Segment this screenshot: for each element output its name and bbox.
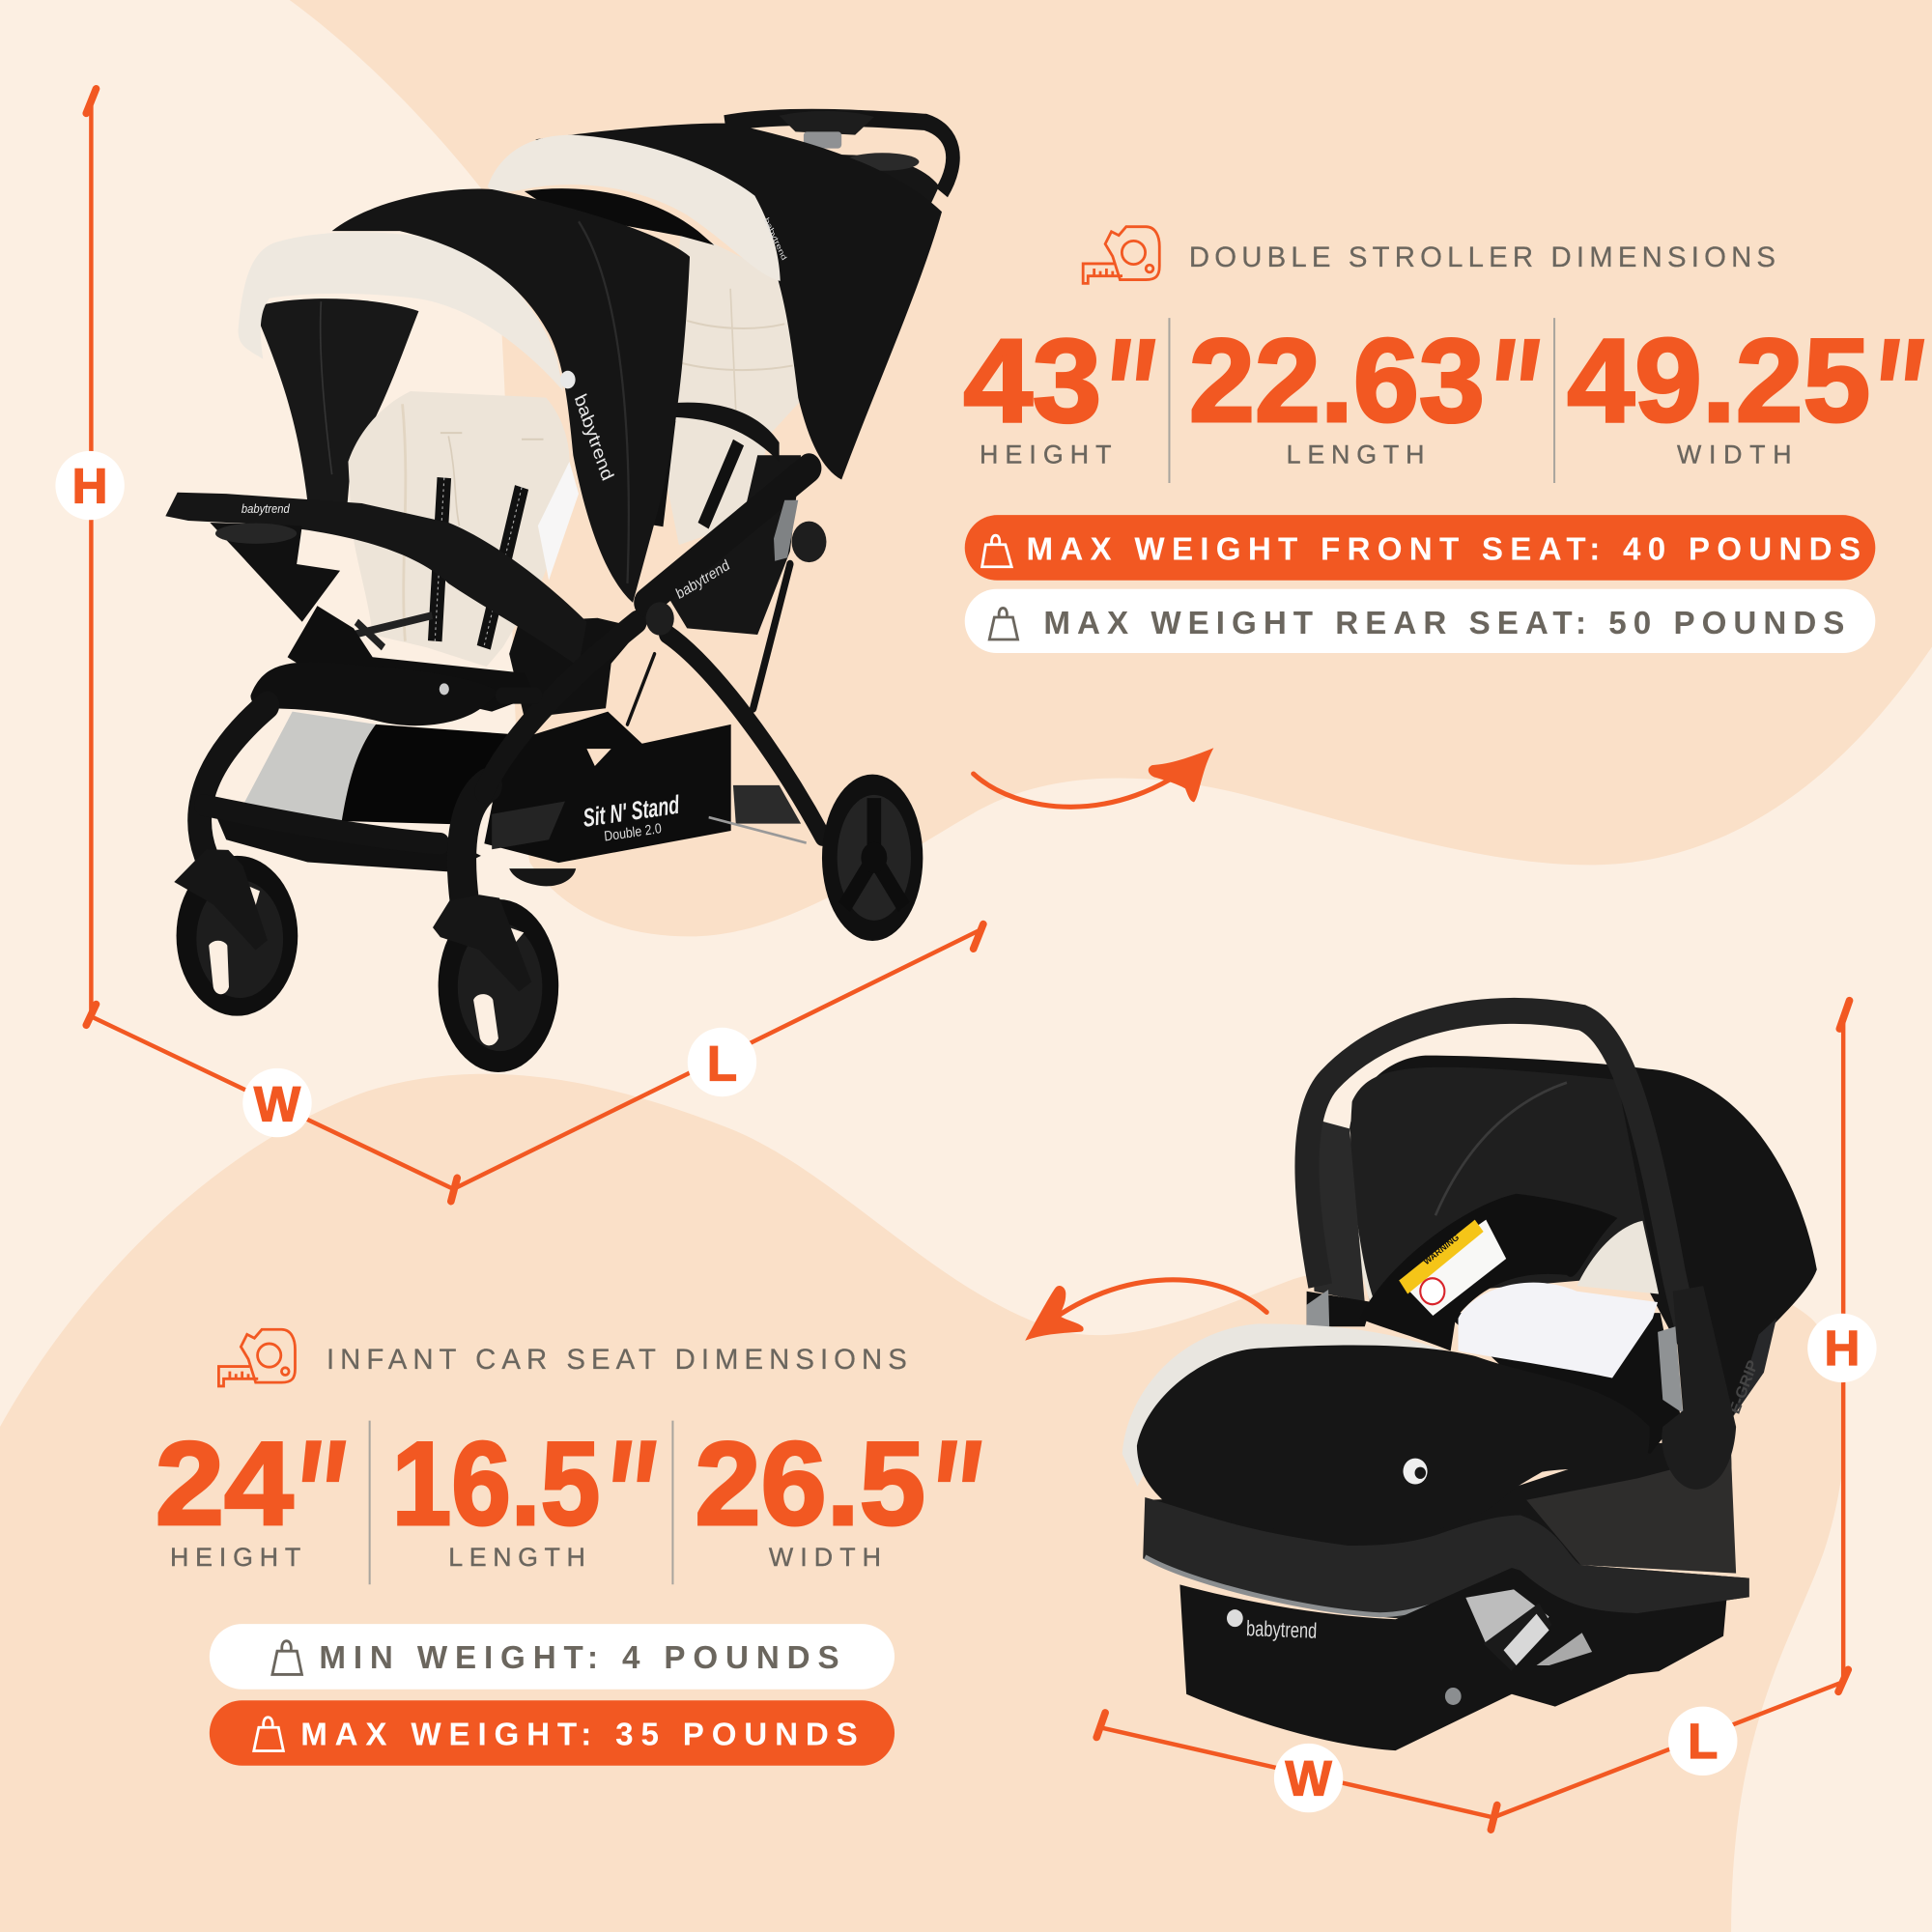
dimension marker W: W [254, 1077, 301, 1132]
dimension: length: 16.5 [392, 1417, 600, 1549]
carry handle [1307, 1010, 1716, 1443]
belt and buckle [1465, 1589, 1592, 1671]
pill: min weight [210, 1624, 895, 1690]
dimension: width: WIDTH [1677, 440, 1792, 469]
warning label [1399, 1220, 1506, 1316]
frame hubs and logo [646, 500, 826, 636]
rear under-seat shadow [660, 455, 801, 635]
frame hubs and logo: babytrend [674, 557, 732, 603]
dimension marker L [688, 1028, 756, 1096]
background blob: bottom left [0, 1074, 1845, 1932]
dimension: width: " [925, 1406, 982, 1591]
head support [1360, 1194, 1617, 1350]
dimension marker H: H [72, 458, 108, 513]
pill: max weight front seat: MAX WEIGHT FRONT SEAT: 40 POUNDS [1026, 532, 1861, 568]
front canopy inner [253, 298, 418, 529]
rear canopy [488, 124, 942, 480]
cream canopy side [1577, 1221, 1659, 1294]
heading: DOUBLE STROLLER DIMENSIONS [1189, 242, 1776, 273]
dimension: length [392, 1406, 657, 1591]
dimension: height: 24 [156, 1417, 294, 1549]
storage basket [484, 712, 731, 863]
dimension: length: LENGTH [448, 1543, 585, 1572]
dimension marker H: H [1824, 1321, 1860, 1376]
infant car seat illustration [1122, 1010, 1817, 1750]
icon: tape measure [218, 1329, 295, 1386]
dark body behind front seat [509, 618, 641, 718]
dimension marker W [242, 1068, 312, 1137]
rear footboard [709, 785, 807, 843]
dimension: height: HEIGHT [980, 440, 1112, 469]
front mesh basket panel [243, 712, 509, 824]
dimension: width: WIDTH [769, 1543, 881, 1572]
background blob: top right [290, 0, 1932, 936]
base body: babytrend [1246, 1615, 1318, 1643]
pill: min weight: MIN WEIGHT: 4 POUNDS [319, 1640, 839, 1676]
storage basket: Sit N' Stand [582, 790, 681, 833]
warning label: WARNING [1422, 1232, 1461, 1266]
rear seat pad [657, 228, 804, 545]
canopy [1347, 1056, 1817, 1416]
front tray and handlebar: babytrend [242, 501, 291, 516]
infant car seat specs [156, 1329, 982, 1766]
double stroller specs [963, 227, 1925, 653]
dimension marker H [1807, 1314, 1877, 1382]
front harness straps [354, 478, 522, 647]
front right wheel [433, 895, 558, 1072]
front left wheel [174, 849, 298, 1016]
storage basket: Double 2.0 [604, 820, 662, 844]
infant car seat dimension lines [1096, 1001, 1877, 1830]
front canopy: babytrend [570, 391, 617, 484]
dimension: width: 49.25 [1567, 314, 1870, 446]
dimension marker L: L [707, 1037, 737, 1092]
blanket [1122, 1323, 1650, 1541]
dimension: height: " [290, 1406, 347, 1591]
front footrest [250, 662, 500, 725]
dimension: length [1189, 303, 1541, 489]
dimension: width [695, 1406, 982, 1591]
dimension: height [963, 303, 1156, 489]
curved arrow toward stroller specs [974, 748, 1213, 807]
rear body [1526, 1454, 1736, 1574]
dimension marker L: L [1688, 1714, 1718, 1769]
base body [1179, 1568, 1727, 1750]
handle pivot arm [1658, 1286, 1736, 1490]
dark backing behind seat [1148, 1443, 1734, 1565]
curved arrow toward car seat specs [1025, 1280, 1266, 1341]
stroller frame [200, 469, 823, 904]
double stroller dimension lines [55, 89, 983, 1202]
front seat pad [348, 391, 579, 667]
side panel [1309, 1118, 1365, 1302]
pill: max weight rear seat: MAX WEIGHT REAR SEAT: 50 POUNDS [1043, 606, 1844, 641]
pill: max weight front seat [965, 515, 1875, 581]
canopy: E-GRIP [1726, 1357, 1762, 1416]
rear seat bar and straps [657, 403, 780, 526]
left latch [1307, 1290, 1373, 1326]
rear wheel [822, 775, 923, 941]
heading: INFANT CAR SEAT DIMENSIONS [327, 1344, 907, 1376]
under-frame body [215, 814, 576, 886]
tray arm overlay [1512, 1516, 1749, 1613]
double stroller illustration [165, 111, 952, 1072]
dimension: length: " [600, 1406, 657, 1591]
rear handlebar [725, 111, 952, 215]
dark lining under insert [1445, 1313, 1681, 1454]
base tray [1143, 1497, 1749, 1618]
icon: tape measure [1083, 227, 1159, 283]
dimension: height: " [1099, 303, 1156, 489]
white seat insert [1459, 1283, 1658, 1378]
dimension: length: " [1484, 303, 1541, 489]
dimension: height: 43 [963, 314, 1101, 446]
pill: max weight: MAX WEIGHT: 35 POUNDS [300, 1718, 858, 1753]
dimension: height: HEIGHT [170, 1543, 300, 1572]
dimension: width: 26.5 [695, 1417, 925, 1549]
dimension: length: LENGTH [1287, 440, 1424, 469]
dimension marker W: W [1286, 1750, 1333, 1805]
dimension: length: 22.63 [1189, 314, 1485, 446]
rear canopy: babytrend [762, 216, 788, 262]
front tray and handlebar [165, 493, 586, 712]
pill: max weight [210, 1700, 895, 1766]
dimension marker W [1274, 1744, 1343, 1812]
dimension marker H [55, 451, 125, 520]
front canopy [239, 189, 690, 603]
pill: max weight rear seat [965, 589, 1875, 653]
dimension: height [156, 1406, 347, 1591]
dimension marker L [1668, 1707, 1737, 1776]
dimension: width [1567, 303, 1925, 489]
